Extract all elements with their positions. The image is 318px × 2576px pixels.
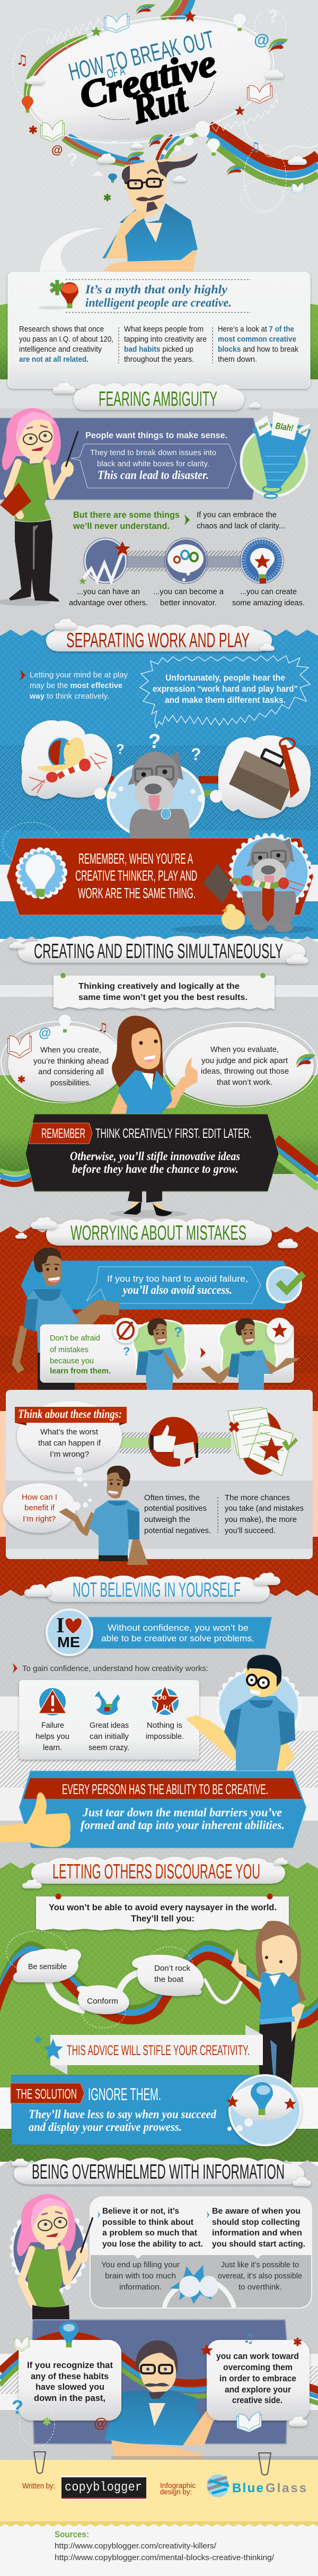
labels: seem crazy.: [89, 1743, 129, 1752]
text: never understand: If you can embrace the: [197, 510, 277, 519]
column 2: throughout the years.: [124, 355, 194, 364]
logo: blueglass: Glass: [266, 2481, 306, 2495]
icon: warning: [39, 1687, 66, 1716]
heading: fearing ambiguity: FEARING AMBIGUITY: [99, 388, 217, 411]
text: be aware: should stop collecting: [212, 2218, 300, 2227]
panel: remember, think creatively first: before they have the chance to grow.: [72, 1162, 238, 1176]
cloud: conform: Conform: [87, 1997, 118, 2006]
logo: copyblogger: copyblogger: [65, 2481, 142, 2495]
icon: do it star: It!: [162, 1703, 171, 1712]
hexagon callout: They tend to break down issues into: [90, 448, 216, 457]
remember text: [75, 850, 197, 901]
left bubble: when you create: When you create,: [40, 1046, 101, 1055]
column 1: Research shows that once: [19, 325, 104, 334]
icon: i love me: [47, 1609, 92, 1655]
three benefit icons with connector: [69, 538, 305, 607]
bubble: if you recognize: down in the past,: [34, 2393, 105, 2403]
text: to gain confidence: To gain confidence, understand how creativity works:: [22, 1664, 208, 1673]
labels: Nothing is: [147, 1721, 182, 1730]
hexagon callout: black and white boxes for clarity.: [97, 459, 209, 468]
bubble: if you recognize: [12, 2321, 121, 2447]
mini man thinking: ?: [174, 1324, 182, 1340]
text: often times: potential negatives.: [144, 1526, 211, 1535]
spiky speech bubble: [140, 656, 310, 728]
icon: green check: [267, 1267, 306, 1302]
dog thinking about play and work: [3, 720, 311, 865]
panel: blue hexagon, avoid failure: [21, 1261, 306, 1309]
left bubble: when you create: [1, 1015, 125, 1103]
sources: http://www.copyblogger.com/creativity-killers/: [55, 2542, 217, 2551]
text: filling your brain: [101, 2260, 180, 2292]
column 2: bad habits picked up: [124, 345, 193, 354]
right bubble: when you evaluate: that won’t work.: [217, 1078, 272, 1087]
cloud: be sensible: [13, 1948, 81, 1982]
cloud: be sensible: Be sensible: [28, 1962, 67, 1971]
cloud: don't rock the boat: [132, 1955, 204, 1996]
labels: helps you: [36, 1732, 69, 1741]
column 1: are not at all related.: [19, 355, 89, 364]
column 2: tapping into creativity are: [124, 335, 207, 344]
ribbon: think about these things: [15, 1407, 127, 1425]
icon: red bulb: ✱: [49, 277, 66, 300]
text: filling your brain: brain with too much: [105, 2272, 176, 2281]
panel: people want things to make sense: [0, 418, 260, 500]
panel: the solution: They’ll have less to say when you succeed: [29, 2108, 216, 2121]
mini man thinking: [123, 1318, 187, 1390]
labels: learn.: [43, 1743, 62, 1752]
panel: remember, think creatively first: Otherwise, you’ll stifle innovative ideas: [70, 1150, 240, 1163]
icon: i love me: I: [56, 1613, 65, 1637]
hero man with open head: [40, 153, 198, 277]
mini man explaining: [201, 1318, 300, 1390]
dog with tie, scarf, briefcase and duck: [172, 836, 315, 934]
ribbon banner: this advice: [33, 2025, 263, 2075]
thought bubble: worst: I’m wrong?: [50, 1450, 89, 1459]
heading: separating work and play: [46, 619, 275, 652]
left bubble: when you create: possibilities.: [50, 1078, 91, 1087]
banner: without confidence: able to be creative or solve problems.: [101, 1633, 254, 1643]
footer: credits paper: [0, 2452, 318, 2527]
thought bubble: worst: [17, 1401, 122, 1487]
icons: ?: [12, 2396, 23, 2418]
labels: Failure: [41, 1721, 64, 1730]
labels: Great ideas: [90, 1721, 129, 1730]
labels: advantage over others.: [69, 598, 148, 607]
icon: red bulb: [38, 277, 78, 310]
text: never understand: chaos and lack of clarity...: [197, 521, 285, 530]
sources: Sources:: [55, 2529, 89, 2539]
heading: not believing in yourself: [24, 1572, 280, 1602]
labels: can initially: [90, 1732, 129, 1741]
labels: [69, 587, 305, 607]
remember text: REMEMBER, WHEN YOU’RE A: [78, 850, 193, 867]
text: filling your brain: You end up filling your: [101, 2260, 180, 2269]
hero illustration: ribbons and decorations: [13, 0, 318, 212]
thought bubble: worst: What’s the worst: [40, 1428, 99, 1437]
text: believe it or not: you lose the ability to act.: [102, 2240, 203, 2249]
right bubble: when you evaluate: When you evaluate,: [210, 1045, 279, 1054]
icon: thought gears: [164, 538, 208, 584]
thought: briefcase: [218, 735, 311, 818]
panel: remember, think creatively first: [25, 1114, 279, 1191]
column 1: you pass an I.Q. of about 120,: [19, 335, 113, 344]
character: woman with brown hair pointing: [231, 1921, 306, 2087]
character: man with glasses: [218, 1670, 299, 1744]
bubble: if you recognize: have slowed you: [36, 2382, 104, 2392]
panel: intro: [8, 272, 310, 388]
title: rut: Rut: [127, 75, 192, 133]
icon: white bulb badge: [19, 851, 64, 897]
icon: rising arrow: [79, 538, 130, 585]
icons: ✱: [42, 2416, 51, 2428]
labels: some amazing ideas.: [232, 598, 305, 607]
panel: every person has the ability: Just tear down the mental barriers you’ve: [82, 1806, 282, 1819]
bubble: you can work toward: creative side.: [232, 2395, 282, 2405]
hero icons around bubble: ✱: [103, 193, 111, 203]
column 1: intelligence and creativity: [19, 345, 102, 354]
column 3: blocks and how to break: [218, 345, 298, 354]
spiky speech bubble: and make them different tasks.: [165, 695, 286, 705]
icon: colliding fists: [164, 2265, 234, 2308]
hero icons around bubble: @: [51, 143, 63, 156]
text: often times: potential positives: [144, 1504, 207, 1513]
panel: blue hexagon, avoid failure: If you try too hard to avoid failure,: [107, 1274, 248, 1284]
icon: paper clips: [34, 2452, 271, 2475]
text: letting your mind be at play: way to think creatively.: [29, 692, 109, 701]
text: believe it or not: possible to think about: [102, 2218, 194, 2227]
icon: tornado with blah papers: Blah!: [258, 421, 270, 431]
footer: credits paper: Written by:: [22, 2482, 55, 2491]
panel: the solution: IGNORE THEM.: [88, 2085, 161, 2104]
icon: tornado with blah papers: Blah!: [301, 428, 309, 435]
panel: information overload: [90, 2197, 312, 2308]
thought: toys: [21, 720, 112, 799]
sources: http://www.copyblogger.com/mental-blocks-creative-thinking/: [55, 2553, 275, 2562]
myth headline: intelligent people are creative.: [85, 296, 232, 309]
title: how to break out: HOW TO BREAK OUT: [66, 25, 217, 86]
labels: ...you can create: [240, 587, 297, 596]
panel: don't be afraid of mistakes: [40, 1318, 300, 1390]
character: bearded man: [104, 2340, 227, 2460]
panel: don't be afraid of mistakes: learn from them.: [50, 1367, 111, 1376]
column 3: [218, 325, 298, 364]
text: believe it or not: [98, 2207, 203, 2249]
text: more chances: The more chances: [225, 1493, 290, 1502]
icon: tornado with blah papers: Blah!: [275, 421, 294, 433]
icon: tornado with blah papers: [241, 412, 311, 498]
hero speech bubble with title: [16, 0, 284, 161]
labels: [36, 1721, 184, 1752]
text: never understand: But there are some things: [73, 510, 180, 520]
heading: worrying about mistakes: [15, 1217, 298, 1248]
text: often times: Often times, the: [144, 1493, 200, 1502]
connector with thumbs and papers: [120, 1411, 283, 1475]
dog thinking about play and work: ?: [191, 745, 201, 764]
icon: papers with star and check: [228, 1407, 298, 1476]
character body: man with glasses: [186, 1655, 296, 1774]
text: overthink: [218, 2260, 302, 2292]
icon: do it star: [149, 1685, 180, 1716]
column 3: most common creative: [218, 335, 296, 344]
character: pink hair woman explaining: [13, 2194, 93, 2334]
tag: the solution: [11, 2083, 84, 2103]
bubble: if you recognize: If you recognize that: [27, 2360, 113, 2370]
character: man with blue shirt: [16, 1248, 120, 1390]
heading: letting others discourage you: [22, 1857, 288, 1889]
panel: don't be afraid of mistakes: Don’t be afraid: [50, 1334, 100, 1343]
tag: the solution: THE SOLUTION: [16, 2086, 77, 2102]
text: believe it or not: a problem so much that: [102, 2229, 198, 2238]
dog thinking about play and work: ?: [116, 741, 125, 757]
icons: ♫: [98, 1021, 108, 1034]
cloud: don't rock the boat: the boat: [154, 1975, 184, 1984]
woman's legs and shoes: [110, 1191, 187, 1217]
remember text: CREATIVE THINKER, PLAY AND: [75, 867, 197, 884]
panel: don't be afraid of mistakes: because you: [50, 1356, 94, 1365]
heading: fearing ambiguity: [53, 382, 261, 411]
text: letting your mind be at play: Letting your mind be at play: [30, 671, 128, 680]
hero icons around bubble: ♫: [249, 140, 261, 154]
panel: every person has the ability: formed and tap into your inherent abilities.: [81, 1818, 285, 1832]
text: letting your mind be at play: [20, 670, 128, 701]
spiky speech bubble: expression “work hard and play hard”: [153, 684, 298, 694]
icons: [200, 2331, 307, 2432]
logo: blueglass: Blue: [232, 2481, 263, 2495]
character: man gesturing: [59, 1466, 148, 1565]
text: be aware: Be aware of when you: [212, 2207, 301, 2216]
title: creative: Creative: [75, 41, 220, 117]
panel: people want things to make sense: People want things to make sense.: [85, 430, 227, 440]
text: be aware: [207, 2207, 305, 2249]
hero icons around bubble: ?: [171, 187, 176, 196]
left bubble: when you create: you’re thinking ahead: [33, 1057, 109, 1066]
remember text: WORK ARE THE SAME THING.: [78, 885, 196, 901]
hexagon callout: This can lead to disaster.: [98, 468, 209, 482]
icon: thumbs up hand: [0, 1792, 70, 1847]
torn note: naysayer: They’ll tell you:: [131, 1913, 195, 1924]
ribbon: think about these things: Think about these things:: [18, 1407, 122, 1421]
text: be aware: information and when: [212, 2229, 302, 2238]
panel: don't be afraid of mistakes: of mistakes: [50, 1345, 89, 1354]
cloud: conform: [77, 1985, 129, 2014]
text: believe it or not: Believe it or not, it’s: [102, 2207, 179, 2216]
column 3: Here’s a look at 7 of the: [218, 325, 294, 334]
hero icons around bubble: ?: [268, 7, 278, 26]
icons: ♫: [243, 2331, 254, 2346]
icons: ✱: [17, 1074, 25, 1085]
text: letting your mind be at play: may be the most effective: [30, 681, 122, 690]
panel: every person has the ability: [0, 1771, 306, 1848]
icon: papers with star and check: ✖: [228, 1419, 240, 1435]
text: more chances: [225, 1493, 304, 1535]
spiky speech bubble: Unfortunately, people hear the: [165, 673, 285, 683]
logo: blueglass: [207, 2474, 306, 2497]
labels: ...you can have an: [77, 587, 140, 596]
panel: the solution: [11, 2075, 301, 2145]
banner: without confidence: [47, 1609, 272, 1655]
footer: credits paper: design by:: [160, 2487, 192, 2496]
panel: the solution: and display your creative prowess.: [29, 2120, 182, 2134]
labels: ...you can become a: [153, 587, 224, 596]
tag: remember: [29, 1123, 92, 1144]
right bubble: when you evaluate: [162, 1022, 317, 1107]
torn note: thinking creatively: Thinking creatively and logically at the: [78, 982, 240, 991]
panel: how creativity works: [19, 1680, 199, 1760]
column 3: them down.: [218, 355, 257, 364]
logo: copyblogger: [61, 2476, 146, 2500]
column 1: [19, 325, 113, 364]
text: more chances: you make), the more: [225, 1515, 297, 1524]
bubble: you can work toward: overcoming them: [223, 2362, 293, 2372]
bubble: you can work toward: and explore your: [225, 2384, 291, 2395]
text: overthink: overeat, it’s also possible: [218, 2272, 302, 2281]
icon: i love me: ME: [57, 1634, 80, 1650]
right bubble: when you evaluate: ideas, throwing out those: [201, 1067, 289, 1076]
ribbons in green section: [0, 1139, 318, 1188]
icons: [12, 2321, 107, 2447]
right bubble: when you evaluate: you judge and pick apart: [201, 1056, 288, 1065]
labels: impossible.: [146, 1732, 184, 1741]
myth headline: [85, 283, 232, 309]
dog thinking about play and work: ?: [148, 730, 161, 753]
text: never understand: [73, 510, 285, 531]
hexagon callout: [71, 444, 236, 488]
bubble: you can work toward: you can work toward: [216, 2351, 299, 2361]
text: overthink: to overthink.: [238, 2283, 282, 2292]
column 2: What keeps people from: [124, 325, 204, 334]
icon: three bulbs: [92, 1683, 127, 1716]
text: often times: [144, 1493, 211, 1535]
text: more chances: you’ll succeed.: [225, 1526, 276, 1535]
torn note: naysayer: You won’t be able to avoid every naysayer in the world.: [49, 1902, 277, 1912]
hero icons around bubble: @: [254, 31, 269, 49]
hero icons around bubble: ✱: [29, 125, 38, 136]
text: often times: outweigh the: [144, 1515, 190, 1524]
text: overthink: Just like it’s possible to: [221, 2260, 299, 2269]
hero icons around bubble: [16, 4, 307, 203]
character: woman with brown hair: [110, 1016, 198, 1123]
text: never understand: we’ll never understand.: [73, 521, 170, 531]
panel: blue hexagon, avoid failure: you’ll also avoid success.: [121, 1283, 232, 1296]
icons: [8, 1015, 108, 1085]
hero icons around bubble: ?: [67, 150, 78, 170]
thought bubble: benefit: benefit if: [24, 1503, 55, 1512]
thought bubble: benefit: I’m right?: [23, 1515, 56, 1524]
thought bubble: benefit: [3, 1483, 92, 1533]
mini man thinking: ?: [123, 1345, 130, 1358]
torn note: thinking creatively: [54, 973, 275, 1009]
title: of a: OF A: [105, 64, 126, 82]
thought bubble: benefit: How can I: [22, 1493, 57, 1502]
text: filling your brain: information.: [119, 2283, 162, 2292]
panel: think about these things: [3, 1390, 313, 1565]
icons: @: [94, 2415, 107, 2431]
thought bubble: worst: that can happen if: [38, 1439, 101, 1448]
left bubble: when you create: and considering all: [38, 1067, 104, 1076]
column 2: [124, 325, 207, 364]
hero icons around bubble: ♫: [16, 53, 28, 68]
text: more chances: you take (and mistakes: [225, 1504, 304, 1513]
torn note: thinking creatively: same time won’t get you the best results.: [78, 993, 248, 1002]
banner: without confidence: Without confidence, you won’t be: [108, 1623, 249, 1633]
icons: ✱: [293, 2337, 302, 2348]
footer: credits paper: Infographic: [160, 2481, 196, 2490]
labels: better innovator.: [160, 598, 217, 607]
panel: remember, play and work: [7, 836, 315, 934]
myth headline: It’s a myth that only highly: [85, 283, 228, 296]
icon: prohibited: [113, 1318, 138, 1343]
ribbons and naysayer clouds: [0, 1931, 318, 2028]
icon: do it star: Do: [156, 1693, 167, 1702]
sources: [55, 2529, 275, 2562]
torn note: naysayer: [36, 1894, 289, 1930]
tag: remember: REMEMBER: [41, 1126, 85, 1141]
text: be aware: you should start acting.: [212, 2240, 305, 2249]
panel: purple conclusion: [0, 2320, 318, 2460]
cloud: don't rock the boat: Don’t rock: [154, 1964, 190, 1973]
icons: @: [39, 1026, 51, 1040]
icon: idea bulb with star: [240, 538, 284, 584]
icon: balloon in thought circle: [226, 2075, 301, 2145]
bubble: you can work toward: in order to embrace: [219, 2373, 296, 2383]
bubble: you can work toward: [200, 2331, 310, 2432]
bubble: if you recognize: any of these habits: [31, 2371, 109, 2381]
character: woman with pink hair and pointer: [0, 408, 78, 606]
